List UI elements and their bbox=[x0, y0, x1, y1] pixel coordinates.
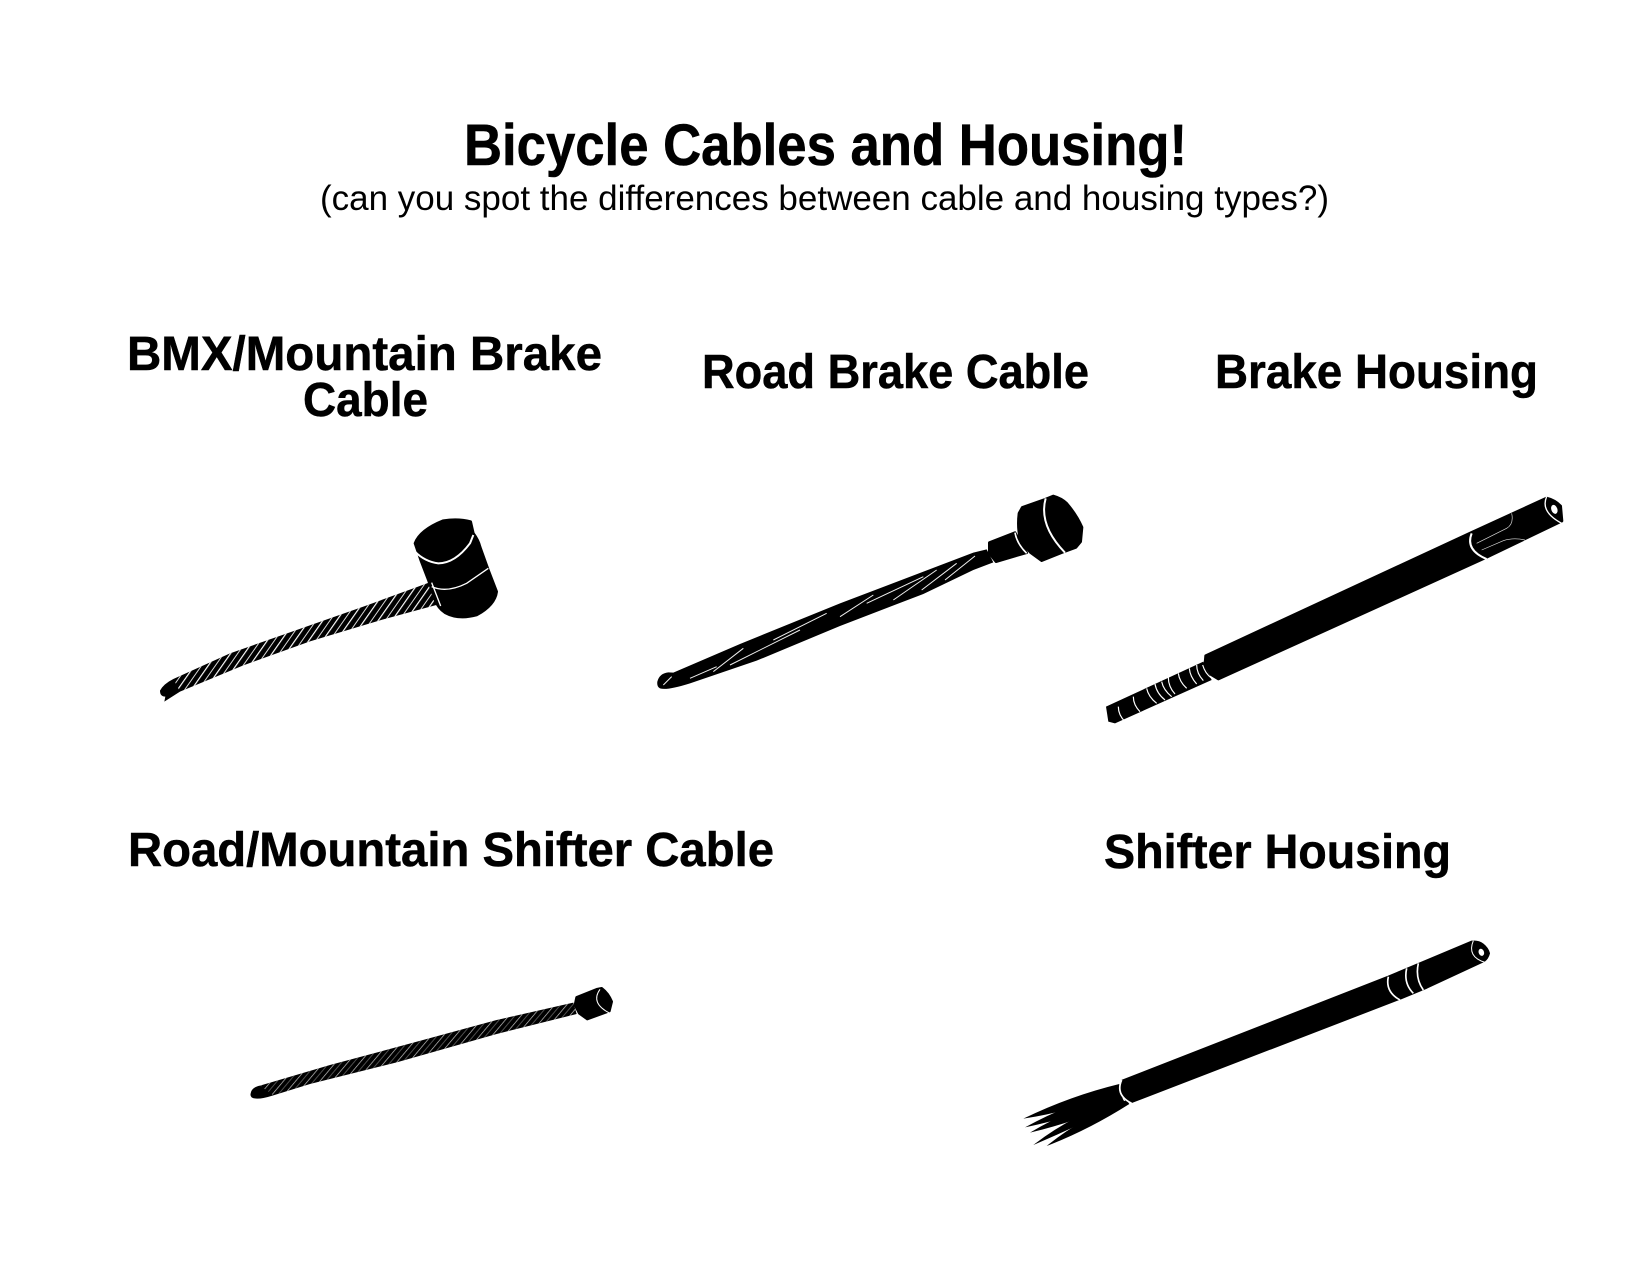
subtitle: (can you spot the differences between cable and housing types?) bbox=[320, 179, 1329, 218]
heading: Brake Housing: Brake Housing bbox=[1215, 346, 1538, 399]
heading: Road/Mountain Shifter Cable: Road/Mountain Shifter Cable bbox=[128, 824, 774, 877]
heading: BMX/Mountain Brake Cable: BMX/Mountain Brake bbox=[127, 328, 602, 381]
illustration: brake housing bbox=[1106, 497, 1562, 723]
title: Bicycle Cables and Housing! bbox=[464, 113, 1187, 178]
illustration: BMX/Mountain brake cable bbox=[160, 520, 497, 702]
illustration: road brake cable bbox=[657, 496, 1082, 689]
heading: BMX/Mountain Brake Cable: Cable bbox=[303, 374, 428, 427]
heading: BMX/Mountain Brake Cable bbox=[127, 328, 602, 427]
illustration: shifter housing bbox=[1023, 941, 1489, 1146]
illustration: road/mountain shifter cable bbox=[250, 988, 612, 1099]
heading: Shifter Housing: Shifter Housing bbox=[1104, 826, 1451, 879]
heading: Road Brake Cable: Road Brake Cable bbox=[702, 346, 1089, 399]
